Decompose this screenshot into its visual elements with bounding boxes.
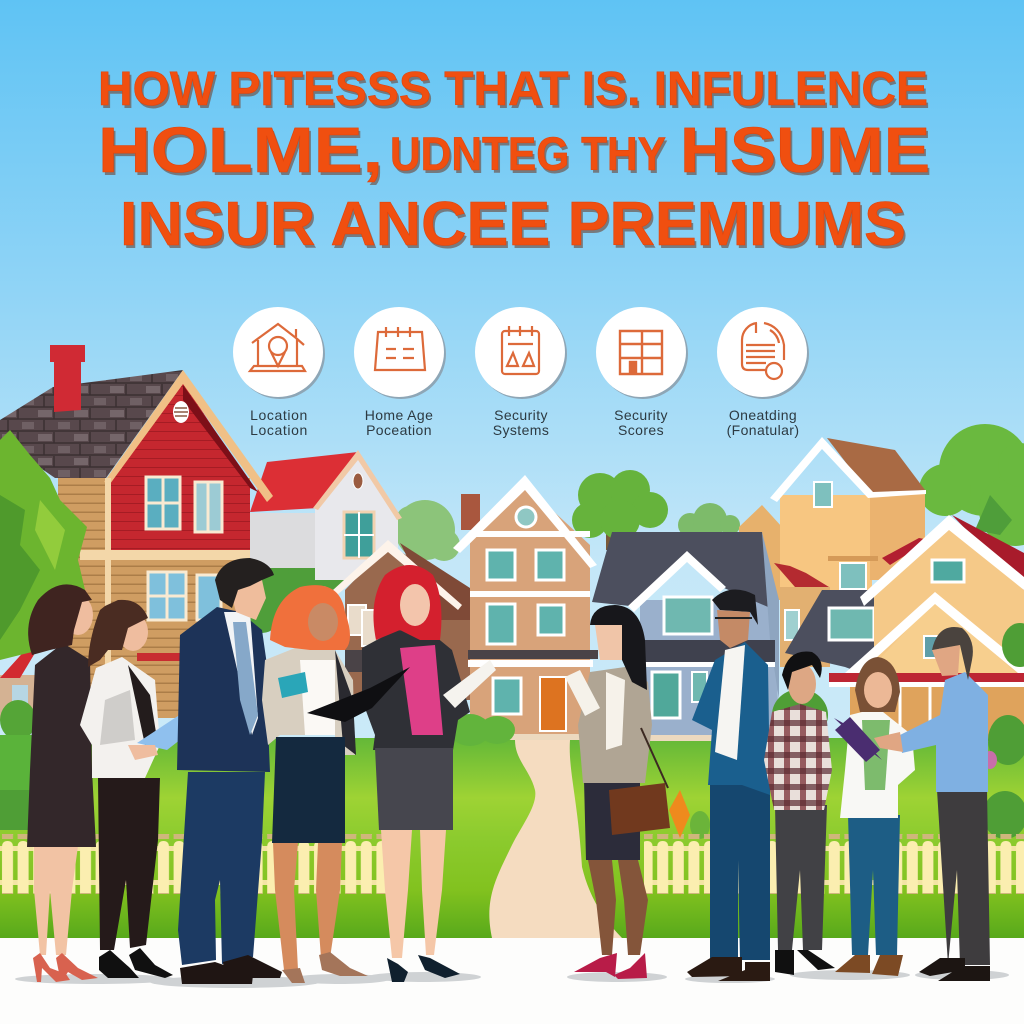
vent <box>173 401 189 423</box>
hand <box>128 745 158 760</box>
jeans <box>848 815 900 955</box>
small left house <box>0 647 42 720</box>
title <box>98 63 932 262</box>
person: man in blue shirt <box>874 627 990 981</box>
factor icons row <box>233 307 809 438</box>
cuff and hand <box>283 702 320 722</box>
legs <box>588 860 648 955</box>
plaid shirt <box>764 704 832 810</box>
label: security systems: Systems <box>493 422 549 438</box>
trousers <box>937 790 990 965</box>
hair <box>932 627 973 680</box>
black folder <box>307 667 410 722</box>
label: onboarding: Oneatding <box>729 407 797 423</box>
head <box>118 613 148 651</box>
title: HSUME <box>682 117 932 189</box>
face <box>932 645 960 676</box>
hair <box>590 605 647 690</box>
house: main red <box>0 345 273 720</box>
tablet <box>834 718 882 760</box>
hair <box>28 584 92 655</box>
label: location: Location <box>250 422 308 438</box>
paper <box>565 670 600 716</box>
gable shadow <box>183 385 258 492</box>
title: HSUME <box>680 114 930 186</box>
person: woman in beige jacket with bag <box>565 605 690 979</box>
blazer <box>362 630 470 750</box>
head <box>230 580 266 620</box>
windows <box>146 477 222 620</box>
green top <box>862 720 890 790</box>
label: security systems: Security <box>494 407 548 423</box>
title: UDNTEG THY <box>392 130 668 183</box>
person: woman in black dress <box>27 584 98 982</box>
face <box>595 625 622 660</box>
jacket <box>177 607 285 772</box>
glasses <box>715 617 752 619</box>
garden path <box>489 740 622 938</box>
roof <box>0 370 183 478</box>
label: security scores: Security <box>614 407 668 423</box>
hair <box>88 600 148 667</box>
dress <box>27 643 96 847</box>
tie <box>233 622 258 735</box>
person: woman in white jacket with tablet <box>834 657 915 976</box>
lawn <box>0 738 1024 938</box>
shoes <box>99 948 173 978</box>
label: home age: Poceation <box>366 422 432 438</box>
shoes <box>282 952 368 983</box>
title: HOLME, <box>98 114 383 186</box>
trousers <box>178 772 265 965</box>
icon: location house <box>233 307 325 399</box>
head <box>788 664 816 704</box>
shoes <box>919 958 990 981</box>
fence <box>0 834 1024 894</box>
book <box>278 672 308 698</box>
jacket <box>692 642 770 795</box>
left tree <box>0 430 87 660</box>
head <box>864 672 892 708</box>
hair <box>215 558 274 608</box>
paper <box>443 660 496 708</box>
shoes <box>775 950 835 975</box>
legs <box>273 843 342 970</box>
trousers <box>98 778 160 950</box>
skirt <box>375 748 453 830</box>
head <box>717 610 750 648</box>
red gable wall <box>108 382 250 552</box>
red heels <box>574 953 647 979</box>
house: white back left <box>250 450 402 580</box>
person: man in navy suit <box>177 558 320 984</box>
title: HOW PITESSS THAT IS. INFULENCE <box>98 63 928 116</box>
legs <box>381 830 446 958</box>
folder <box>137 710 203 750</box>
person: woman with orange hair <box>262 585 368 983</box>
hair <box>373 565 441 640</box>
post and band <box>80 478 250 720</box>
house: centre tan three-storey <box>453 475 598 740</box>
head <box>308 603 338 641</box>
skirt <box>584 780 640 860</box>
shrubs <box>0 623 1024 839</box>
label: location: Location <box>250 407 308 423</box>
strap <box>641 728 668 788</box>
shirt <box>224 612 258 735</box>
background trees <box>244 424 1024 633</box>
hair <box>855 657 900 712</box>
icon: home age calendar <box>354 307 446 399</box>
chimney <box>50 345 85 412</box>
house: right tan upper <box>739 437 926 605</box>
shoes <box>687 957 770 981</box>
shirt <box>715 645 745 760</box>
trousers <box>710 783 770 960</box>
title: UDNTEG THY <box>390 127 666 180</box>
jacket <box>578 667 652 783</box>
person: woman with red hair <box>307 565 496 982</box>
pink top <box>400 645 443 735</box>
person: woman in white blazer <box>80 600 203 978</box>
label: home age: Home Age <box>365 407 433 423</box>
blazer <box>80 657 160 778</box>
head <box>400 584 430 626</box>
label: onboarding: (Fonatular) <box>727 422 799 438</box>
title: INSUR ANCEE PREMIUMS <box>120 190 906 259</box>
shoes <box>387 955 460 982</box>
sidewalk <box>0 938 1024 1024</box>
legs <box>34 846 78 955</box>
orange flower <box>669 790 690 838</box>
icon: window panes <box>596 307 688 399</box>
trousers <box>775 805 827 950</box>
hair <box>712 590 758 625</box>
head <box>63 595 93 635</box>
lower siding <box>58 478 250 718</box>
house: centre brown <box>333 540 470 700</box>
jacket <box>840 708 915 818</box>
shoes <box>835 955 903 976</box>
house: right cream with red roof <box>774 515 1024 742</box>
porch roof <box>137 653 182 661</box>
ground shadows <box>15 970 1009 988</box>
title: HOW PITESSS THAT IS. INFULENCE <box>100 66 930 119</box>
hair <box>782 651 822 690</box>
coral heels <box>33 953 98 982</box>
icon: document with dial <box>717 307 809 399</box>
shoes <box>180 955 282 984</box>
title: HOLME, <box>100 117 385 189</box>
icon: security calendar <box>475 307 567 399</box>
hand <box>874 732 903 752</box>
shirt <box>900 672 988 792</box>
gable trim <box>104 370 273 502</box>
bag <box>609 783 670 835</box>
person: man in blue jacket with glasses <box>687 590 770 981</box>
house: grey-blue <box>592 532 779 741</box>
hair <box>270 585 350 650</box>
skirt <box>272 737 345 843</box>
label: security scores: Scores <box>618 422 664 438</box>
blazer <box>262 648 355 755</box>
title: INSUR ANCEE PREMIUMS <box>122 193 908 262</box>
person: plaid shirt <box>764 651 835 975</box>
